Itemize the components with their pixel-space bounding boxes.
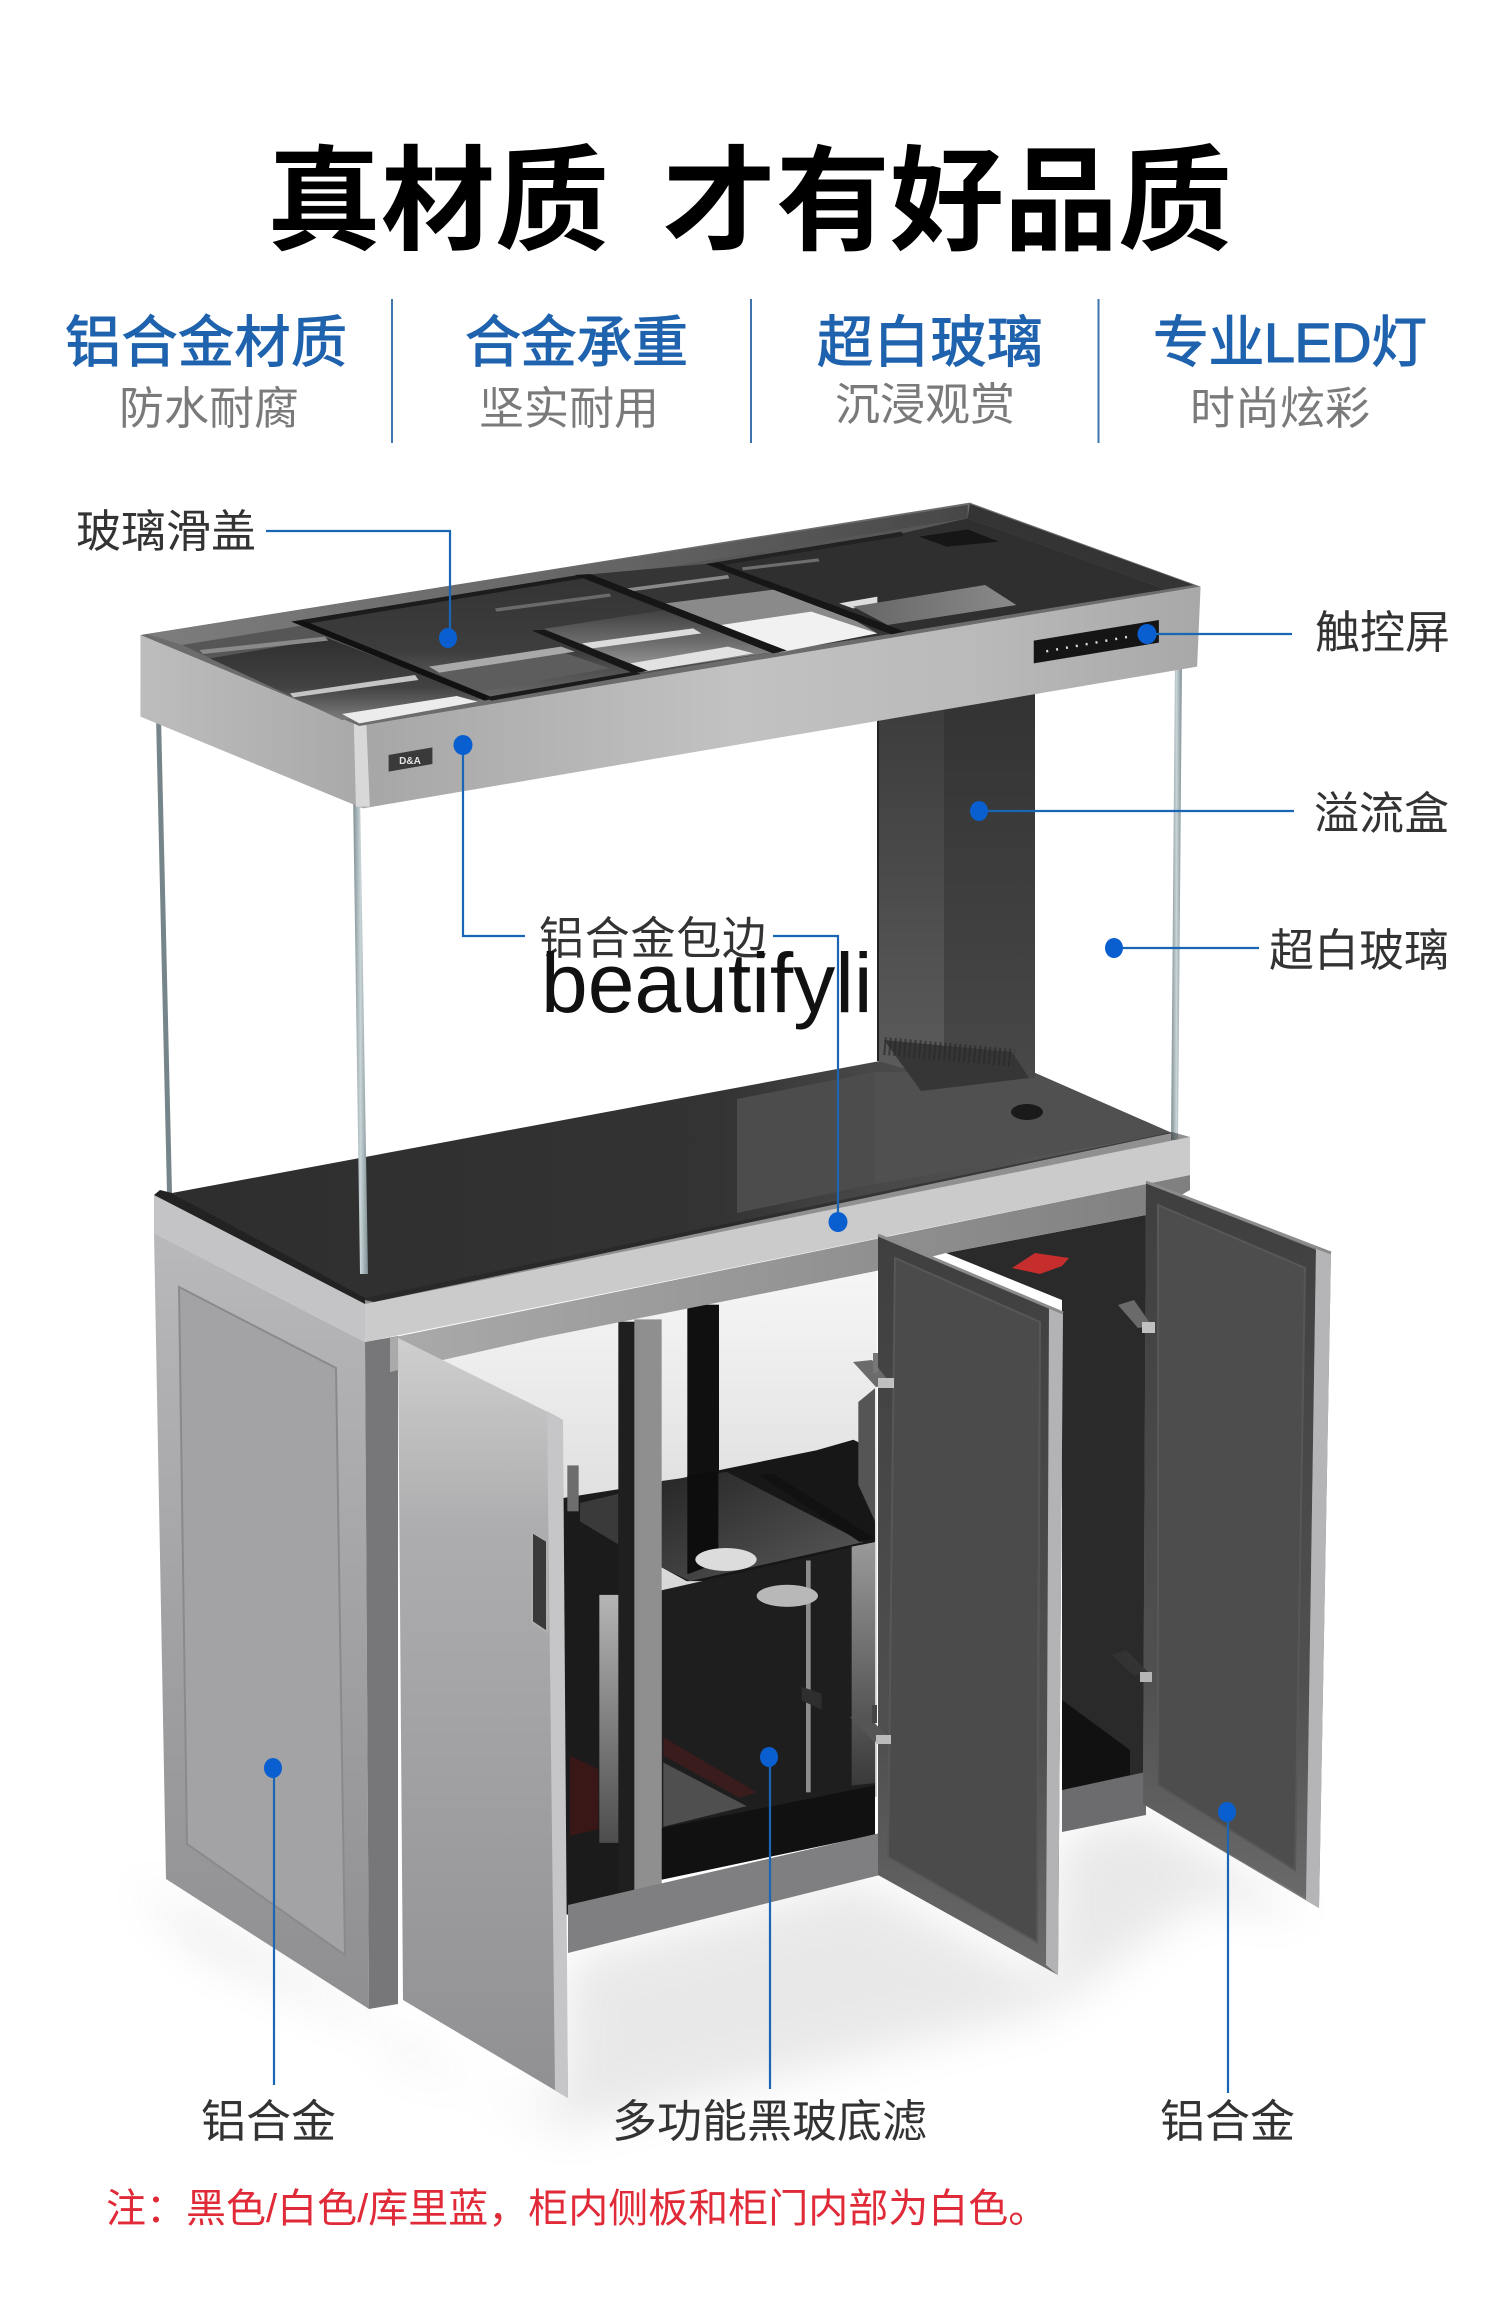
platform rim <box>154 1132 1190 1342</box>
hinge lower <box>850 1705 891 1744</box>
glass slide A <box>291 575 777 700</box>
title: 才有好品质 <box>662 139 1232 266</box>
feature: professional LED light: 专业LED灯 <box>1153 311 1427 374</box>
glass frame bars <box>291 575 589 624</box>
callout: left alloy panel: 铝合金 <box>201 2096 336 2147</box>
door handle <box>532 1532 547 1632</box>
upper frame band <box>390 1175 1190 1372</box>
red part <box>1012 1253 1069 1274</box>
feature: ultra-clear glass: 超白玻璃 <box>817 311 1043 374</box>
hinge lower <box>1112 1650 1152 1682</box>
left compartment <box>560 1489 635 1916</box>
feature: ultra-clear glass <box>817 311 1043 430</box>
overflow box <box>878 692 1043 1120</box>
callout: ultra-clear glass <box>1105 925 1449 976</box>
front pillar <box>634 1319 662 1916</box>
callout: overflow box: 溢流盒 <box>1314 788 1449 839</box>
cover inner base <box>140 503 1201 726</box>
callout: overflow box <box>970 788 1449 839</box>
pump valve <box>858 1388 875 1521</box>
touch panel <box>1034 620 1159 663</box>
left open door <box>398 1338 568 2098</box>
sump body <box>662 1542 875 1880</box>
watermark: beautifyli <box>541 936 873 1030</box>
left compartment <box>210 638 485 720</box>
callout: touch screen: 触控屏 <box>1315 607 1450 658</box>
right open door <box>1112 1182 1331 1908</box>
filter media discs <box>695 1548 757 1571</box>
feature: alloy load bearing: 坚实耐用 <box>479 383 659 434</box>
drain knob <box>1011 1104 1043 1120</box>
callout: right alloy door: 铝合金 <box>1160 2096 1295 2147</box>
logo badge <box>389 747 432 772</box>
rear shelf of sump <box>662 1440 875 1581</box>
logo text: D&A <box>399 756 421 767</box>
title: 真材质 <box>267 139 609 266</box>
glass panes <box>156 660 1182 1274</box>
callout: left alloy panel <box>201 1758 336 2147</box>
feature: aluminium alloy material: 铝合金材质 <box>65 311 347 374</box>
middle bright tray <box>582 564 895 652</box>
feature: professional LED light <box>1153 311 1427 434</box>
callout: aluminium edging: 铝合金包边 <box>539 913 767 964</box>
callout: glass sliding cover <box>76 506 457 648</box>
callout: black glass sump: 多功能黑玻底滤 <box>612 2096 927 2147</box>
callout: ultra-clear glass: 超白玻璃 <box>1269 925 1449 976</box>
feature: alloy load bearing: 合金承重 <box>465 311 688 374</box>
feature row <box>65 299 1427 443</box>
feature: aluminium alloy material: 防水耐腐 <box>119 383 299 434</box>
cabinet left side panel <box>154 1233 398 2009</box>
overflow comb <box>884 1040 1029 1091</box>
hinge upper <box>853 1353 894 1388</box>
upper rim and cover <box>140 503 1201 808</box>
callout: glass sliding cover: 玻璃滑盖 <box>76 506 256 557</box>
glass slide B <box>706 518 1166 633</box>
rim faces <box>140 635 363 808</box>
rear pillar <box>687 1305 719 1580</box>
aquarium product illustration <box>130 503 1331 2130</box>
callout: touch screen <box>1138 607 1450 658</box>
feature: alloy load bearing <box>465 311 688 434</box>
hinge upper <box>1118 1300 1155 1333</box>
cabinet interior <box>440 1269 877 1916</box>
footnote: 注：黑色/白色/库里蓝，柜内侧板和柜门内部为白色。 <box>106 2187 1048 2231</box>
aquarium floor <box>172 1061 1172 1302</box>
middle open door <box>850 1235 1063 1975</box>
callout: black glass sump <box>612 1747 927 2147</box>
feature: professional LED light: 时尚炫彩 <box>1190 383 1370 434</box>
feature: aluminium alloy material <box>65 311 347 434</box>
callout: right alloy door <box>1160 1802 1295 2147</box>
callout: aluminium edging <box>454 735 848 1232</box>
cabinet bottom frame <box>568 1833 880 1953</box>
floor shadow <box>130 1815 1310 2130</box>
dark right compartment <box>946 1215 1146 1832</box>
rear rails <box>200 637 328 654</box>
feature: ultra-clear glass: 沉浸观赏 <box>835 379 1015 430</box>
